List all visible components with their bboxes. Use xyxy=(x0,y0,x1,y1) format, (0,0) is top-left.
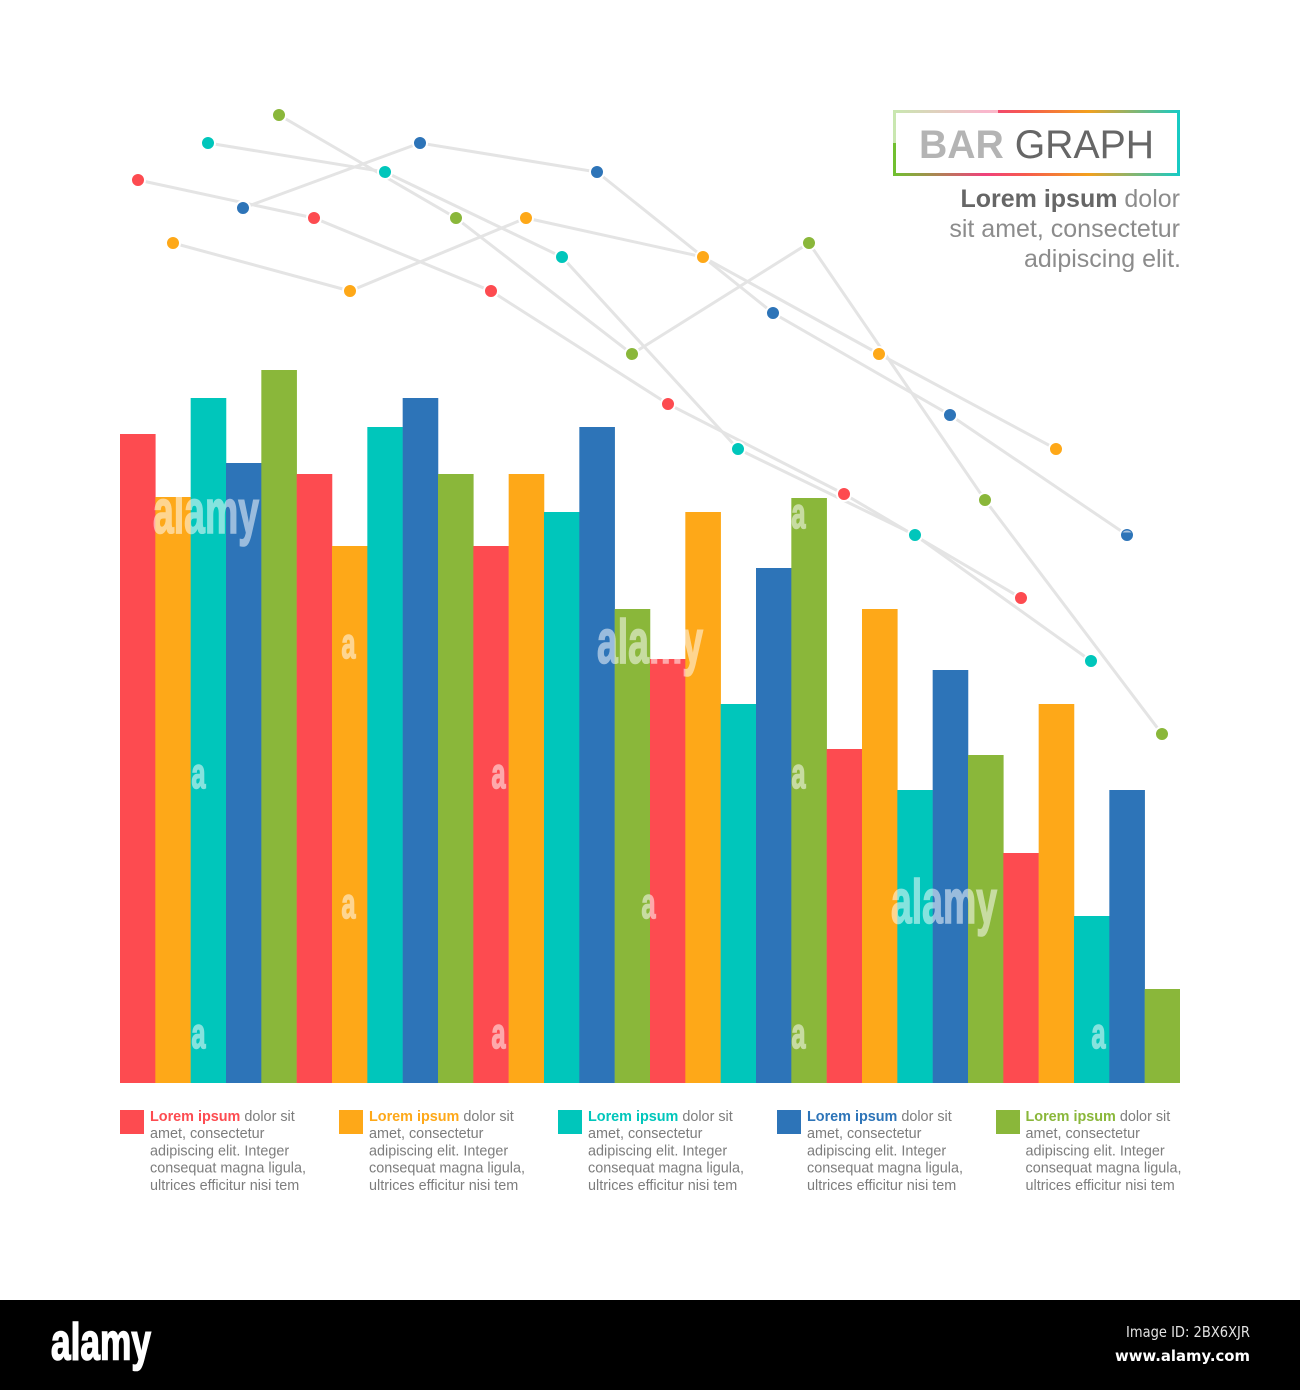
watermark letters over bars xyxy=(153,478,1106,1058)
legend: orange: adipiscing elit. Integer xyxy=(369,1144,508,1160)
watermark letters over bars: a xyxy=(192,1010,206,1058)
legend: red: adipiscing elit. Integer xyxy=(150,1144,289,1160)
legend: green: consequat magna ligula, xyxy=(1026,1160,1182,1176)
legend: teal: consequat magna ligula, xyxy=(588,1160,744,1176)
watermark letters over bars: alamy xyxy=(597,608,703,677)
title box xyxy=(893,111,1178,174)
watermark letters over bars: a xyxy=(492,1010,506,1058)
legend: orange: amet, consectetur xyxy=(369,1126,484,1142)
legend: red: consequat magna ligula, xyxy=(150,1160,306,1176)
legend: red xyxy=(120,1109,306,1194)
subtitle text: sit amet, consectetur xyxy=(949,215,1180,243)
watermark letters over bars: a xyxy=(492,750,506,798)
watermark letters over bars: a xyxy=(642,880,656,928)
line chart: dots xyxy=(131,108,1169,741)
legend: blue: adipiscing elit. Integer xyxy=(807,1144,946,1160)
legend: blue xyxy=(777,1109,963,1194)
watermark letters over bars: a xyxy=(1092,1010,1106,1058)
legend: blue: ultrices efficitur nisi tem xyxy=(807,1178,956,1194)
legend: orange: Lorem ipsum dolor sit xyxy=(369,1109,514,1125)
legend: teal: Lorem ipsum dolor sit xyxy=(588,1109,733,1125)
legend: blue: amet, consectetur xyxy=(807,1126,922,1142)
legend: teal: ultrices efficitur nisi tem xyxy=(588,1178,737,1194)
subtitle text: Lorem ipsum dolor xyxy=(960,185,1180,213)
watermark letters over bars: a xyxy=(792,490,806,538)
legend: red: ultrices efficitur nisi tem xyxy=(150,1178,299,1194)
legend: orange: ultrices efficitur nisi tem xyxy=(369,1178,518,1194)
legend: red: Lorem ipsum dolor sit xyxy=(150,1109,295,1125)
legend: green: Lorem ipsum dolor sit xyxy=(1026,1109,1170,1125)
legend: blue: consequat magna ligula, xyxy=(807,1160,963,1176)
watermark letters over bars: a xyxy=(792,1010,806,1058)
watermark letters over bars: alamy xyxy=(891,868,997,937)
footer logo: alamy xyxy=(51,1314,151,1372)
bar chart xyxy=(120,370,1180,1083)
footer image id: Image ID: 2BX6XJR xyxy=(1126,1323,1250,1341)
legend: green: adipiscing elit. Integer xyxy=(1026,1144,1165,1160)
watermark letters over bars: alamy xyxy=(153,478,259,547)
legend: green xyxy=(996,1109,1182,1194)
footer bar xyxy=(0,1300,1300,1390)
legend: teal: adipiscing elit. Integer xyxy=(588,1144,727,1160)
legend: red: amet, consectetur xyxy=(150,1126,265,1142)
footer url: www.alamy.com xyxy=(1115,1347,1250,1365)
legend: green: amet, consectetur xyxy=(1026,1126,1140,1142)
line chart: connector lines xyxy=(138,115,1162,734)
subtitle text: adipiscing elit. xyxy=(1024,245,1181,273)
watermark letters over bars: a xyxy=(192,750,206,798)
legend: green: ultrices efficitur nisi tem xyxy=(1026,1178,1175,1194)
legend: teal xyxy=(558,1109,744,1194)
legend: teal: amet, consectetur xyxy=(588,1126,703,1142)
legend: orange: consequat magna ligula, xyxy=(369,1160,525,1176)
legend: blue: Lorem ipsum dolor sit xyxy=(807,1109,952,1125)
title text: BAR GRAPH xyxy=(919,123,1154,167)
subtitle text xyxy=(949,185,1181,273)
watermark letters over bars: a xyxy=(342,880,356,928)
watermark letters over bars: a xyxy=(792,750,806,798)
watermark letters over bars: a xyxy=(342,620,356,668)
legend: orange xyxy=(339,1109,525,1194)
